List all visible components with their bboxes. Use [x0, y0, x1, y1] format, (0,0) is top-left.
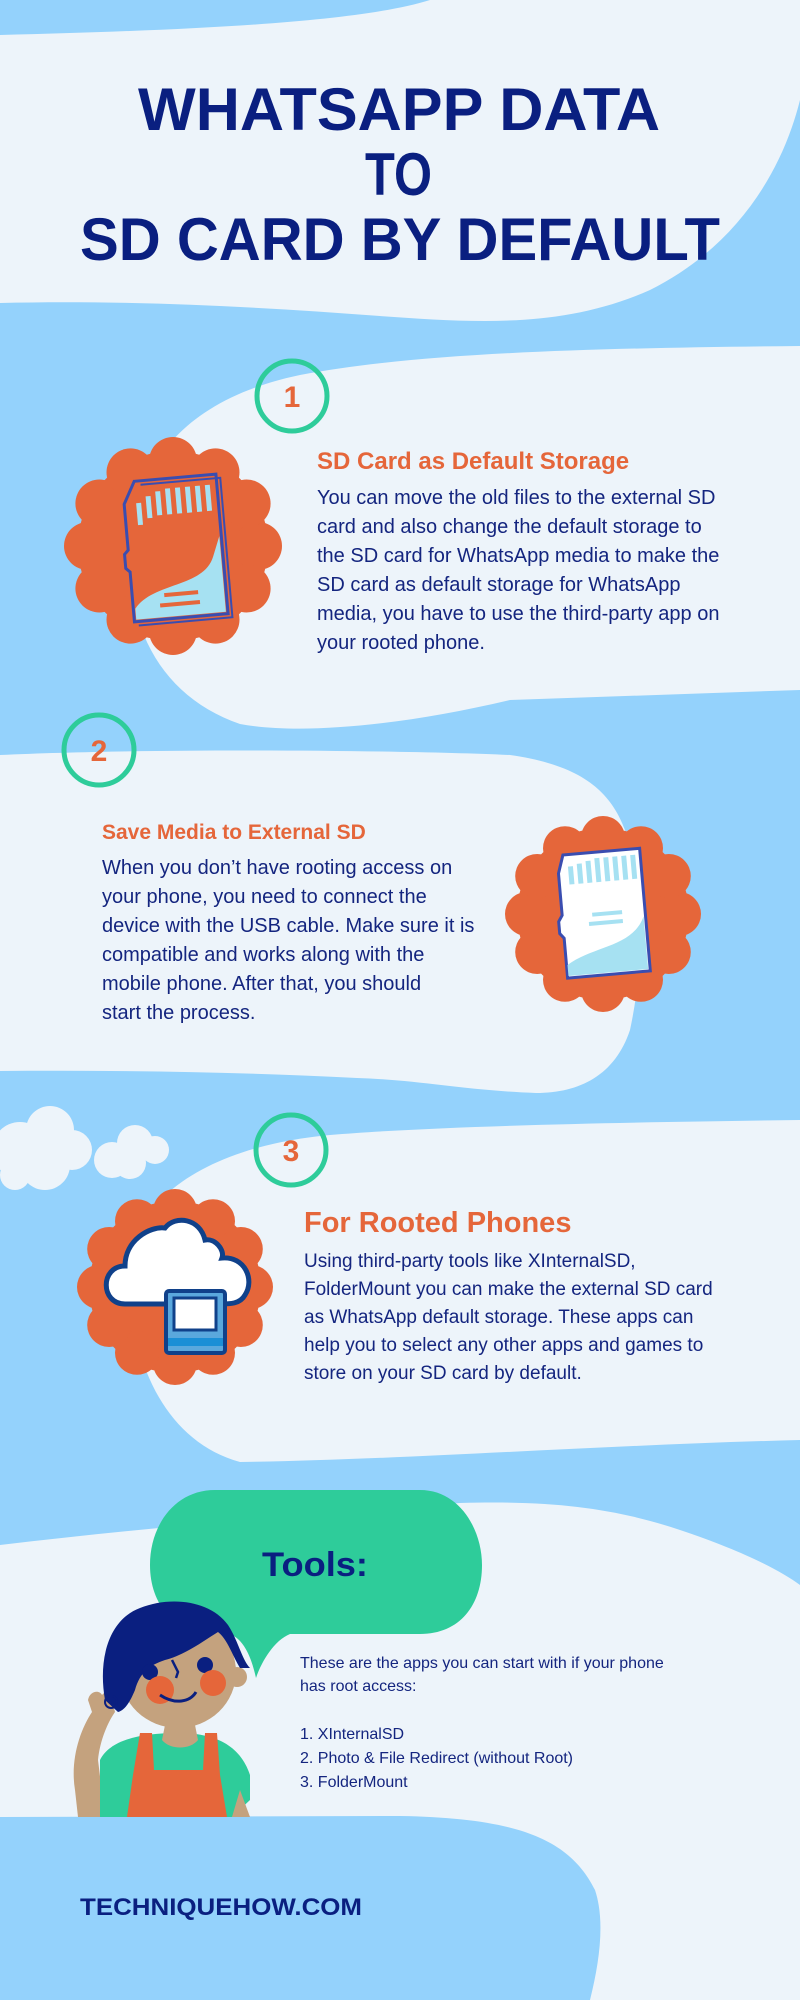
text block 3: FolderMount you can make the external SD card — [304, 1279, 713, 1300]
icon: SD card badge 2 — [505, 816, 701, 1012]
footer: site name: TECHNIQUEHOW.COM — [80, 1894, 362, 1921]
text block 2: your phone, you need to connect the — [102, 886, 427, 908]
tools text block: has root access: — [300, 1678, 416, 1695]
text block 2 — [102, 857, 474, 1024]
step 3 number circle: 3 — [283, 1135, 299, 1168]
text block 3: store on your SD card by default. — [304, 1363, 582, 1384]
clouds decoration — [0, 1106, 169, 1190]
text block 2: compatible and works along with the — [102, 944, 424, 966]
text block 3: Using third-party tools like XInternalSD, — [304, 1251, 636, 1272]
heading 1: SD Card as Default Storage — [317, 448, 629, 475]
text block 1: card and also change the default storage to — [317, 516, 702, 538]
text block 1: your rooted phone. — [317, 632, 485, 654]
text block 1: media, you have to use the third-party app on — [317, 603, 719, 625]
text block 3 — [304, 1251, 713, 1384]
icon: cloud badge 3 — [77, 1189, 273, 1385]
speech bubble: Tools: Tools: — [262, 1546, 368, 1584]
text block 1: the SD card for WhatsApp media to make the — [317, 545, 719, 567]
tools text block: These are the apps you can start with if your phone — [300, 1655, 664, 1672]
text block 2: device with the USB cable. Make sure it is — [102, 915, 474, 937]
text block 2: start the process. — [102, 1002, 255, 1024]
step 2 number circle: 2 — [91, 735, 107, 768]
tools text block: 3. FolderMount — [300, 1774, 408, 1791]
title: WHATSAPP DATA — [138, 76, 660, 143]
step 1 number circle — [257, 361, 327, 431]
title: TO — [365, 141, 432, 208]
title: SD CARD BY DEFAULT — [80, 206, 720, 273]
step 1 number circle: 1 — [284, 381, 300, 414]
text block 2: mobile phone. After that, you should — [102, 973, 421, 995]
text block 2: When you don’t have rooting access on — [102, 857, 452, 879]
text block 1: SD card as default storage for WhatsApp — [317, 574, 681, 596]
text block 1 — [317, 487, 719, 654]
heading 3: For Rooted Phones — [304, 1207, 571, 1239]
title — [80, 76, 720, 273]
character: kid — [74, 1601, 250, 1817]
text block 3: as WhatsApp default storage. These apps can — [304, 1307, 693, 1328]
step 3 number circle — [256, 1115, 326, 1185]
speech bubble: Tools — [150, 1490, 482, 1678]
tools text block: 1. XInternalSD — [300, 1726, 404, 1743]
text block 1: You can move the old files to the external SD — [317, 487, 715, 509]
icon: SD card badge 1 — [64, 437, 282, 655]
tools text block — [300, 1655, 664, 1791]
heading 2: Save Media to External SD — [102, 821, 366, 844]
tools text block: 2. Photo & File Redirect (without Root) — [300, 1750, 573, 1767]
text block 3: help you to select any other apps and games to — [304, 1335, 703, 1356]
step 2 number circle — [64, 715, 134, 785]
